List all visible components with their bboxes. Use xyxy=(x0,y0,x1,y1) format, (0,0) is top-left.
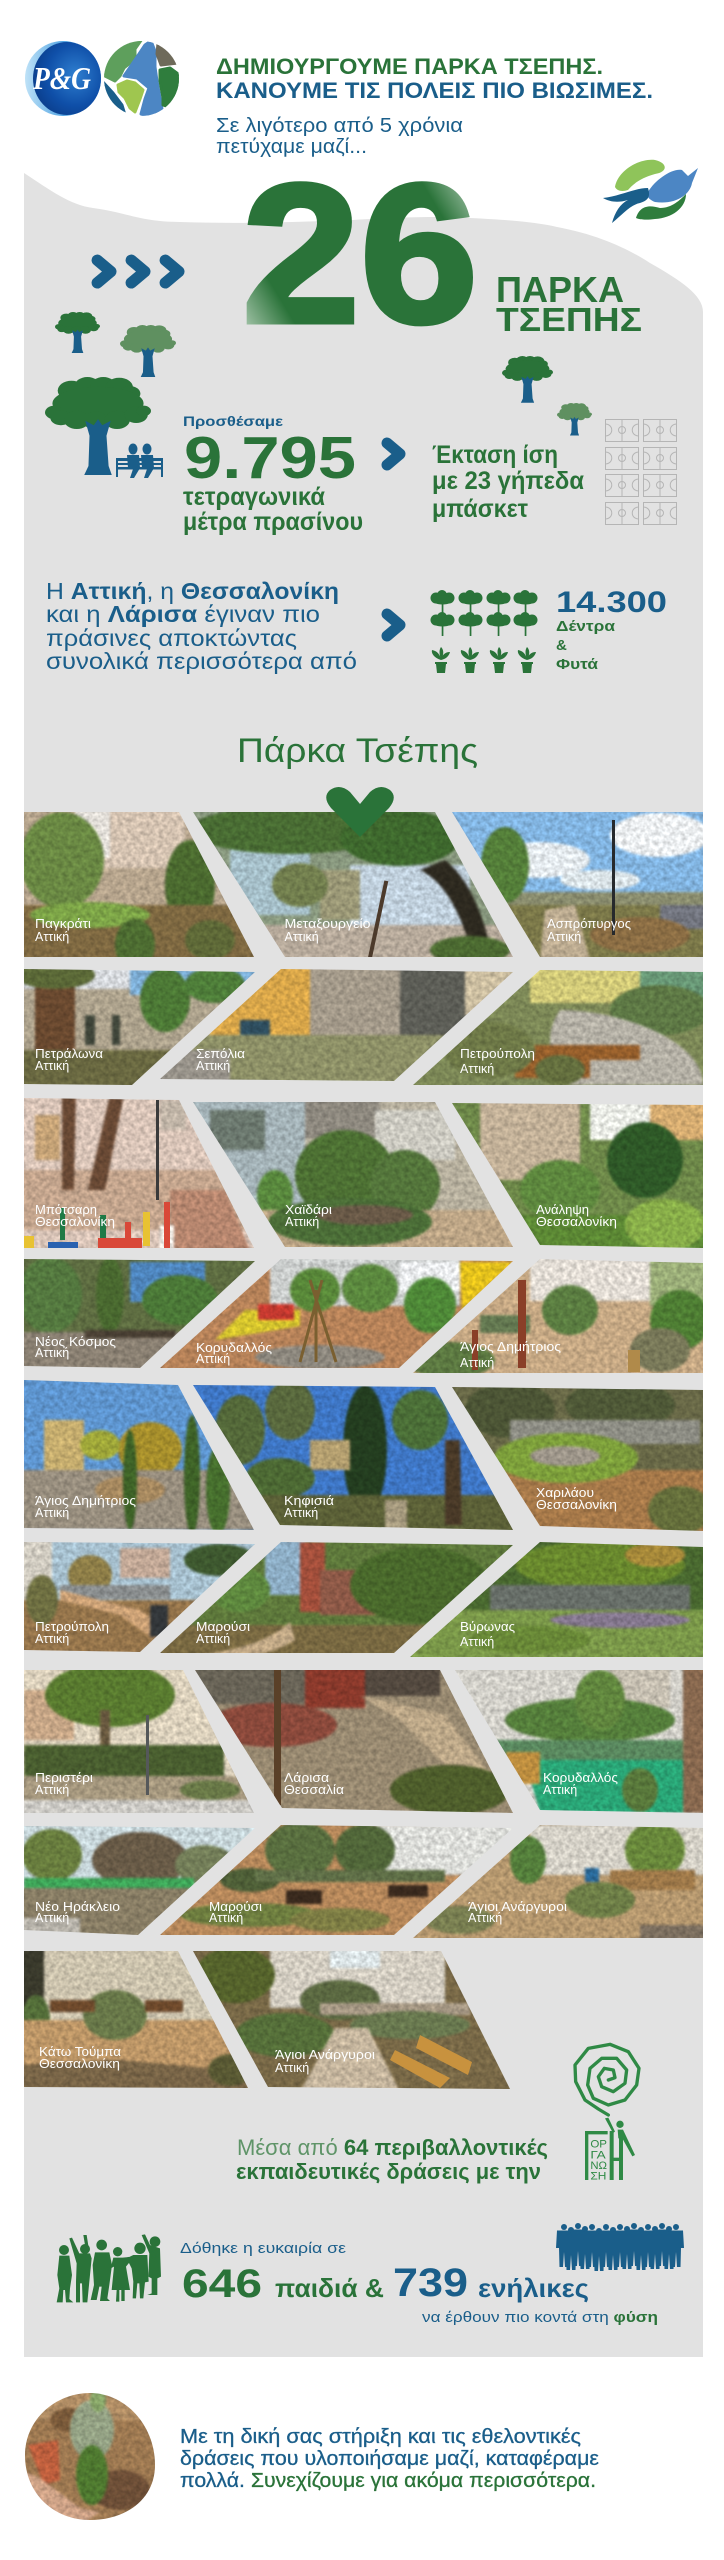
label: Αττική xyxy=(543,1783,577,1797)
park: Μεταξουργείο xyxy=(193,812,513,957)
logo: spiral organisation: ΓΑ xyxy=(590,2149,607,2161)
label: Αττική xyxy=(284,930,319,944)
subtitle: πετύχαμε μαζί... xyxy=(216,136,367,158)
park: Παγκράτι xyxy=(24,812,254,957)
stat: trees and plants: & xyxy=(556,637,567,654)
park: Μπότσαρη xyxy=(20,1095,260,1250)
icon: tree big xyxy=(45,377,151,475)
park: Πετρούπολη xyxy=(413,970,703,1085)
stat: 646 children xyxy=(182,2262,384,2306)
arrow xyxy=(387,614,400,636)
icon: bench with people xyxy=(116,444,163,478)
label: Θεσσαλονίκη xyxy=(536,1498,617,1512)
label: Νέο Ηράκλειο xyxy=(35,1900,120,1914)
park: Περιστέρι xyxy=(24,1670,254,1813)
park: Κηφισιά xyxy=(190,1380,520,1532)
label: Αττική xyxy=(284,1506,318,1520)
label: parks xyxy=(496,269,642,338)
park: Άγιος Δημήτριος 1 xyxy=(413,1259,703,1373)
park: Λάρισα xyxy=(190,1668,520,1816)
logo: spiral organisation xyxy=(575,2044,639,2183)
label: Αττική xyxy=(285,1215,319,1229)
label xyxy=(35,1494,136,1520)
label: Κηφισιά xyxy=(284,1494,334,1508)
label: Αττική xyxy=(35,930,69,944)
icon: pots xyxy=(432,647,536,673)
label xyxy=(209,1900,262,1925)
label xyxy=(196,1620,250,1646)
label: Θεσσαλονίκη xyxy=(35,1215,115,1229)
text: closing: πολλά. Συνεχίζουμε για ακόμα περισσότερα. xyxy=(180,2470,596,2492)
logo: spiral organisation: ΝΩ xyxy=(590,2160,607,2172)
label xyxy=(39,2045,121,2071)
heading: pocket parks: Πάρκα Τσέπης xyxy=(237,732,478,770)
stat: 739 adults: 739 xyxy=(393,2261,468,2305)
label: Παγκράτι xyxy=(35,917,91,931)
label: Αττική xyxy=(547,930,581,944)
text: environmental actions: εκπαιδευτικές δράσεις με την xyxy=(236,2159,541,2184)
icon: tree small dark xyxy=(55,312,100,353)
text: opportunity: Δόθηκε η ευκαιρία σε xyxy=(180,2240,346,2257)
text: regions: και η Λάρισα έγιναν πιο xyxy=(46,601,320,627)
icon: adults silhouettes xyxy=(556,2223,684,2271)
label: Αττική xyxy=(209,1911,243,1925)
label xyxy=(536,1203,617,1229)
stat: trees and plants: Φυτά xyxy=(556,656,599,673)
logo: P&G xyxy=(25,41,101,116)
icon: triple arrows xyxy=(97,260,179,283)
label xyxy=(35,1047,103,1073)
park: Χαϊδάρι xyxy=(190,1098,520,1253)
label: parks: ΠΑΡΚΑ xyxy=(496,269,624,310)
text: regions: Η Αττική, η Θεσσαλονίκη xyxy=(46,578,339,604)
text: basketball equivalence xyxy=(432,441,585,523)
park: Χαριλάου xyxy=(452,1387,703,1531)
icon: tree right dark xyxy=(502,356,553,403)
park: Κορυδαλλός 2 xyxy=(450,1668,706,1816)
stat: unit text xyxy=(183,483,363,536)
stat: 14.300: 14.300 xyxy=(556,586,667,619)
label xyxy=(196,1047,245,1073)
photo: planting xyxy=(25,2393,155,2520)
label xyxy=(285,1203,332,1229)
park: Άγιοι Ανάργυροι 1 xyxy=(410,1822,706,1942)
label: Νέος Κόσμος xyxy=(35,1335,116,1349)
label: Άγιος Δημήτριος xyxy=(35,1494,136,1508)
park: Πετρούπολη 2 xyxy=(20,1540,260,1655)
photo grid xyxy=(15,806,712,2093)
stat: trees and plants xyxy=(556,618,616,673)
icon: tree small light xyxy=(120,325,176,377)
label xyxy=(35,1335,116,1360)
park: Πετράλωνα xyxy=(24,969,255,1085)
label: Αττική xyxy=(468,1911,502,1925)
park: Κορυδαλλός 1 xyxy=(160,1256,520,1371)
text: environmental actions xyxy=(236,2135,548,2184)
label xyxy=(196,1341,272,1366)
park: Μαρούσι 1 xyxy=(160,1540,520,1658)
label: Αττική xyxy=(35,1059,69,1073)
label: Λάρισα xyxy=(284,1771,329,1785)
label: Κορυδαλλός xyxy=(196,1341,272,1355)
logo: P&G: P&G xyxy=(32,60,91,96)
icon: trees grid xyxy=(430,590,538,636)
label: Περιστέρι xyxy=(35,1771,93,1785)
park: Σεπόλια xyxy=(160,965,520,1085)
label: Χαριλάου xyxy=(536,1486,594,1500)
label: Σεπόλια xyxy=(196,1047,245,1061)
text: basketball equivalence: μπάσκετ xyxy=(432,495,528,523)
label: Αττική xyxy=(275,2061,309,2075)
stat: added text: Προσθέσαμε xyxy=(183,413,283,429)
text: regions xyxy=(46,578,357,674)
label: Αττική xyxy=(460,1635,494,1649)
label: Θεσσαλονίκη xyxy=(536,1215,617,1229)
text: closer to nature: να έρθουν πιο κοντά στη φύση xyxy=(422,2309,658,2326)
label: Αττική xyxy=(35,1783,69,1797)
label xyxy=(35,917,91,944)
label: Άγιοι Ανάργυροι xyxy=(468,1900,567,1914)
label: Θεσσαλονίκη xyxy=(39,2057,120,2071)
label: Άγιοι Ανάργυροι xyxy=(275,2048,375,2062)
park: Άγιοι Ανάργυροι 2 xyxy=(190,1947,515,2093)
park: Άγιος Δημήτριος 2 xyxy=(20,1378,260,1535)
park: Μαρούσι 2 xyxy=(160,1822,520,1938)
label: Θεσσαλία xyxy=(284,1783,344,1797)
stat: trees and plants: Δέντρα xyxy=(556,618,616,635)
label: Αττική xyxy=(35,1346,69,1360)
stat: unit text: τετραγωνικά xyxy=(183,483,326,511)
park: Βύρωνας xyxy=(410,1540,706,1660)
label: Πετρούπολη xyxy=(460,1047,535,1061)
text: closing: Με τη δική σας στήριξη και τις εθελοντικές xyxy=(180,2426,581,2448)
text: closing: δράσεις που υλοποιήσαμε μαζί, καταφέραμε xyxy=(180,2448,599,2470)
logo: spiral organisation: ΣΗ xyxy=(590,2171,606,2183)
label: Αττική xyxy=(35,1632,69,1646)
park: Ανάληψη xyxy=(450,1100,706,1251)
text: closing xyxy=(180,2426,599,2492)
text: basketball equivalence: με 23 γήπεδα xyxy=(432,467,585,495)
icon: tree right light xyxy=(557,403,592,436)
label: parks: ΤΣΕΠΗΣ xyxy=(496,301,642,338)
label: Μαρούσι xyxy=(196,1620,250,1634)
text: environmental actions: Μέσα από 64 περιβαλλοντικές xyxy=(237,2135,548,2160)
icon: basketball courts xyxy=(605,419,677,524)
label: Αττική xyxy=(460,1356,494,1370)
label: Πετράλωνα xyxy=(35,1047,103,1061)
logo: spiral organisation: ΟΡ xyxy=(590,2139,607,2151)
text: regions: πράσινες αποκτώντας xyxy=(46,625,297,651)
label: Κορυδαλλός xyxy=(543,1771,618,1785)
title: ΚΑΝΟΥΜΕ ΤΙΣ ΠΟΛΕΙΣ ΠΙΟ ΒΙΩΣΙΜΕΣ. xyxy=(216,78,653,103)
label xyxy=(275,2048,375,2075)
label: Άγιος Δημήτριος xyxy=(460,1340,561,1354)
label xyxy=(536,1486,617,1512)
park: Νέος Κόσμος xyxy=(24,1259,255,1368)
label: Ασπρόπυργος xyxy=(547,917,631,931)
text: basketball equivalence: Έκταση ίση xyxy=(432,441,558,469)
label xyxy=(35,1771,93,1797)
icon: bird logo xyxy=(603,160,698,223)
stat: 739 adults xyxy=(393,2261,589,2305)
stat: 739 adults: ενήλικες xyxy=(478,2273,589,2303)
title xyxy=(216,54,653,103)
stat: 646 children: 646 xyxy=(182,2262,262,2306)
label xyxy=(468,1900,567,1925)
label: Κάτω Τούμπα xyxy=(39,2045,121,2059)
label xyxy=(35,1620,109,1646)
label: Αττική xyxy=(196,1059,230,1073)
label xyxy=(35,1900,120,1925)
park: Κάτω Τούμπα xyxy=(20,1948,255,2092)
label: Αττική xyxy=(196,1352,230,1366)
label: Αττική xyxy=(460,1062,494,1076)
subtitle: Σε λιγότερο από 5 χρόνια xyxy=(216,115,463,137)
park: Νέο Ηράκλειο xyxy=(20,1824,260,1938)
label: Αττική xyxy=(35,1911,69,1925)
text: regions: συνολικά περισσότερα από xyxy=(46,648,357,674)
label: Αττική xyxy=(196,1632,230,1646)
label xyxy=(460,1340,561,1370)
label: Μαρούσι xyxy=(209,1900,262,1914)
title: ΔΗΜΙΟΥΡΓΟΥΜΕ ΠΑΡΚΑ ΤΣΕΠΗΣ. xyxy=(216,54,603,79)
icon: heart xyxy=(326,787,394,837)
stat: unit text: μέτρα πρασίνου xyxy=(183,508,363,536)
label xyxy=(284,1771,344,1797)
label: Μεταξουργείο xyxy=(284,917,371,931)
stat: 9.795: 9.795 xyxy=(184,425,356,491)
label xyxy=(460,1047,535,1076)
label xyxy=(460,1620,515,1649)
label: Βύρωνας xyxy=(460,1620,515,1634)
subtitle xyxy=(216,115,463,158)
arrow xyxy=(387,443,400,465)
label: Ανάληψη xyxy=(536,1203,589,1217)
label xyxy=(35,1203,115,1229)
label xyxy=(284,917,371,944)
icon: children silhouettes xyxy=(57,2234,161,2302)
logo: earth xyxy=(102,39,181,117)
label: Αττική xyxy=(35,1506,69,1520)
big number 26: 26 xyxy=(242,143,478,364)
label: Μπότσαρη xyxy=(35,1203,97,1217)
label: Χαϊδάρι xyxy=(285,1203,332,1217)
label xyxy=(547,917,631,944)
label: Πετρούπολη xyxy=(35,1620,109,1634)
park: Ασπρόπυργος xyxy=(450,808,710,960)
label xyxy=(543,1771,618,1797)
stat: 646 children: παιδιά & xyxy=(275,2273,384,2303)
label xyxy=(284,1494,334,1520)
